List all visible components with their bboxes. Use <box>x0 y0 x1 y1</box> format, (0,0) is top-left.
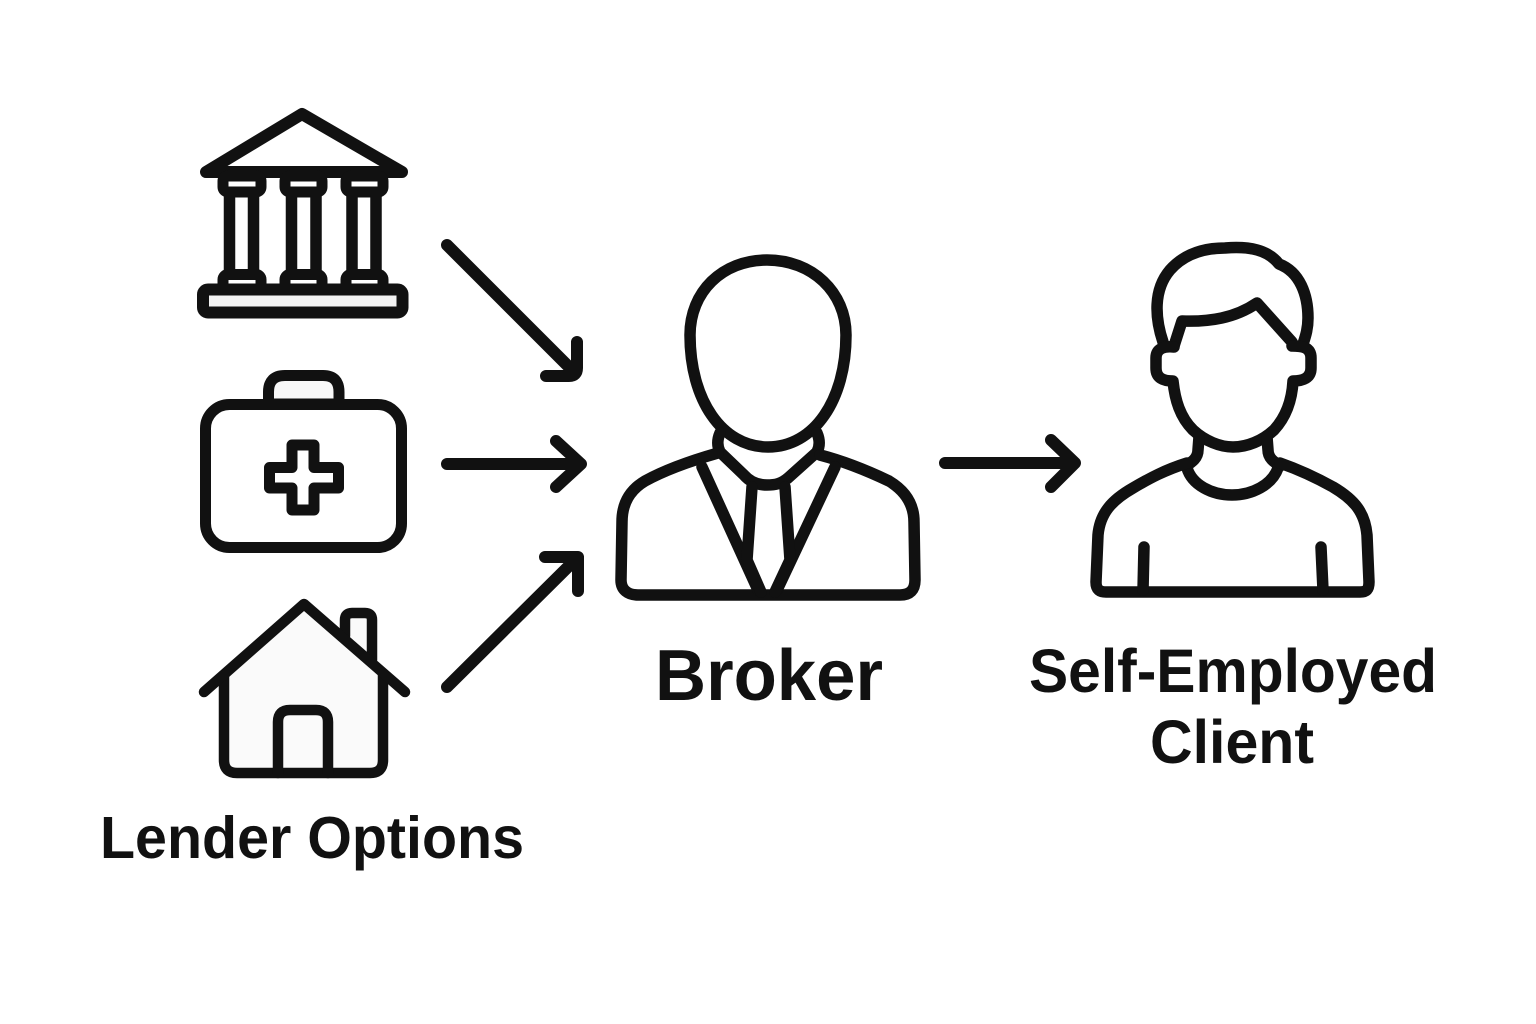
label: Self-Employed Client <box>1029 637 1437 776</box>
arrow: medical to broker <box>447 441 581 487</box>
label: Lender Options: Lender Options <box>100 805 524 871</box>
label: Self-Employed Client: Self-Employed <box>1029 637 1437 705</box>
icon: self-employed client <box>1096 248 1369 592</box>
icon: bank <box>203 114 402 312</box>
label: Self-Employed Client: Client <box>1150 708 1314 776</box>
arrow: house to broker <box>447 557 578 687</box>
icon: medical briefcase <box>206 376 402 548</box>
arrow: broker to client <box>945 440 1075 487</box>
label: Broker: Broker <box>655 636 883 716</box>
icon: house <box>204 604 405 773</box>
arrow: bank to broker <box>447 245 577 376</box>
icon: broker <box>621 260 915 595</box>
